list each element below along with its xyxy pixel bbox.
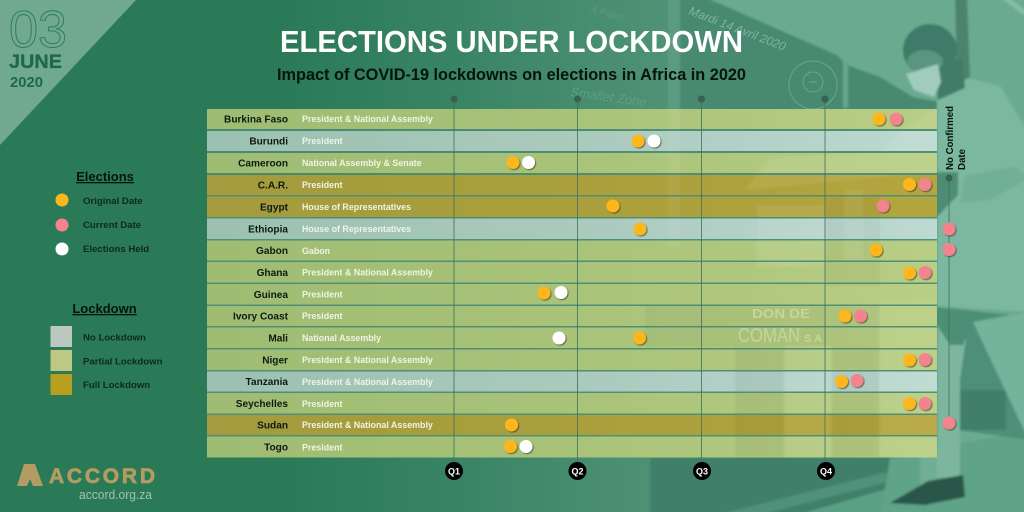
row: Seychelles	[207, 393, 937, 414]
day number: 03	[9, 1, 67, 59]
markers: C.A.R.	[903, 178, 932, 191]
row: Guinea: President	[302, 290, 342, 300]
hem shadow	[937, 307, 1010, 345]
legend: current date: Current Date	[83, 220, 141, 231]
row: Burkina Faso	[207, 109, 937, 129]
row: Ivory Coast: President	[302, 311, 342, 321]
markers: Niger	[903, 353, 932, 366]
Q3 marker: Q3	[696, 466, 708, 476]
chalk clock on board	[789, 61, 837, 109]
row: Tanzania: Tanzania	[246, 377, 288, 388]
markers: Ghana	[903, 266, 932, 280]
stencil lettering on ballot box: COMAN	[738, 325, 800, 347]
row: Sudan	[207, 415, 937, 435]
markers: Burundi	[632, 134, 660, 148]
subtitle: Impact of COVID-19 lockdowns on elections in Africa in 2020	[277, 66, 746, 84]
between legs	[958, 320, 1024, 440]
row: Ghana	[207, 262, 937, 282]
markers: Gabon	[870, 243, 956, 256]
row: Seychelles: Seychelles	[236, 399, 288, 410]
row: Gabon: Gabon	[256, 246, 288, 257]
markers: Sudan	[505, 416, 956, 432]
legend: elections	[56, 169, 149, 256]
arm and tablet	[960, 166, 1024, 203]
quarter timeline	[445, 96, 968, 480]
markers: Seychelles	[903, 397, 932, 410]
no confirmed date line	[946, 174, 952, 424]
row: Sudan: President & National Assembly	[302, 420, 433, 430]
markers: Ethiopia	[634, 222, 956, 236]
row: Cameroon: National Assembly & Senate	[302, 158, 422, 168]
year: 2020	[10, 75, 43, 91]
row: Mali	[207, 328, 937, 348]
markers: Tanzania	[835, 374, 864, 388]
legend: full lockdown: Full Lockdown	[83, 380, 150, 391]
stencil lettering on ballot box: DON DE	[752, 307, 810, 321]
underarm shadow	[937, 172, 958, 217]
chalk writing on board	[570, 4, 788, 110]
row: Burundi: Burundi	[249, 136, 288, 148]
neck	[935, 58, 965, 100]
election table rows	[207, 109, 937, 458]
row: Gabon	[207, 240, 937, 260]
Q2 marker	[568, 96, 586, 480]
row: C.A.R.	[207, 175, 937, 195]
markers: Cameroon	[506, 156, 535, 169]
Q1 marker: Q1	[448, 466, 460, 476]
row: Seychelles: President	[302, 399, 342, 409]
top-left date triangle	[0, 0, 136, 145]
date	[9, 1, 67, 91]
chalk writing on board: Mardi 14 Avril 2020	[687, 4, 788, 54]
icon: Africa in A shape	[17, 464, 43, 486]
legend: no lockdown: No Lockdown	[83, 332, 146, 344]
right leg	[973, 312, 1024, 443]
Q1 marker	[445, 96, 463, 480]
markers: Egypt	[606, 200, 890, 212]
row: Sudan: Sudan	[257, 420, 288, 432]
legend: elections held: Elections Held	[83, 244, 149, 255]
row: Gabon: Gabon	[302, 246, 330, 256]
row: Ethiopia	[207, 218, 937, 239]
row: Burundi: President	[302, 136, 342, 146]
legend heading: Lockdown	[72, 301, 137, 316]
markers: Mali	[552, 332, 646, 344]
row: Ghana: President & National Assembly	[302, 268, 433, 278]
row: Guinea: Guinea	[254, 290, 288, 301]
row: Niger	[207, 350, 937, 370]
row: Ivory Coast: Ivory Coast	[233, 312, 289, 322]
row: Mali: Mali	[268, 334, 288, 344]
shoe	[890, 475, 965, 505]
row: Egypt: Egypt	[260, 202, 289, 214]
chalk writing on board: A Pales	[588, 4, 625, 24]
row: Togo	[207, 436, 937, 458]
row: C.A.R.: C.A.R.	[258, 180, 288, 192]
row: Togo: President	[302, 442, 342, 452]
Q3 marker	[693, 96, 711, 480]
legend: original date: Original Date	[83, 196, 143, 207]
no confirmed date label: Date	[957, 148, 968, 170]
markers: Guinea	[538, 286, 568, 300]
photo showing through the bands	[645, 108, 936, 457]
Q4 marker	[817, 96, 835, 480]
row: Cameroon: Cameroon	[238, 158, 288, 170]
row: Ivory Coast	[207, 306, 937, 326]
head	[902, 23, 958, 63]
chalk writing on board: Smallet Zone	[570, 84, 648, 110]
markers: Burkina Faso	[872, 112, 902, 126]
stencil lettering on ballot box: S A	[804, 333, 822, 345]
row: Tanzania: President & National Assembly	[302, 377, 433, 387]
row: Mali: National Assembly	[302, 333, 381, 343]
row: Niger: Niger	[262, 356, 288, 366]
legend heading: Elections	[76, 169, 134, 184]
left leg	[937, 306, 970, 478]
row: Burkina Faso: Burkina Faso	[224, 114, 288, 126]
row: C.A.R.: President	[302, 180, 342, 190]
row: Egypt	[207, 196, 937, 217]
row: Tanzania	[207, 372, 937, 392]
month: JUNE	[9, 52, 62, 73]
photo: polling officer at chalkboard	[650, 0, 1024, 512]
markers: Ivory Coast	[838, 310, 867, 322]
legend: partial lockdown: Partial Lockdown	[83, 356, 163, 368]
row: Togo: Togo	[264, 442, 288, 454]
markers: Togo	[504, 440, 532, 453]
row: Cameroon	[207, 153, 937, 173]
robe	[937, 78, 1024, 312]
legend: lockdown	[50, 301, 163, 395]
no confirmed date label: No Confirmed	[945, 106, 956, 170]
row: Burkina Faso: President & National Assembly	[302, 114, 433, 124]
title: ELECTIONS UNDER LOCKDOWN	[280, 25, 743, 59]
row: Guinea	[207, 284, 937, 304]
Q2 marker: Q2	[571, 466, 584, 476]
stencil lettering on ballot box	[738, 307, 822, 347]
row: Ghana: Ghana	[257, 268, 288, 279]
face mask	[906, 64, 941, 97]
row: Ethiopia: Ethiopia	[248, 224, 288, 236]
election date markers	[504, 112, 956, 453]
website: accord.org.za	[79, 488, 152, 502]
row: Niger: President & National Assembly	[302, 355, 433, 365]
row: Ethiopia: House of Representatives	[302, 224, 411, 234]
wordmark: ACCORD	[49, 465, 155, 488]
logo: ACCORD	[17, 464, 155, 502]
row: Egypt: House of Representatives	[302, 202, 411, 212]
row: Burundi	[207, 131, 937, 151]
Q4 marker: Q4	[820, 466, 832, 476]
